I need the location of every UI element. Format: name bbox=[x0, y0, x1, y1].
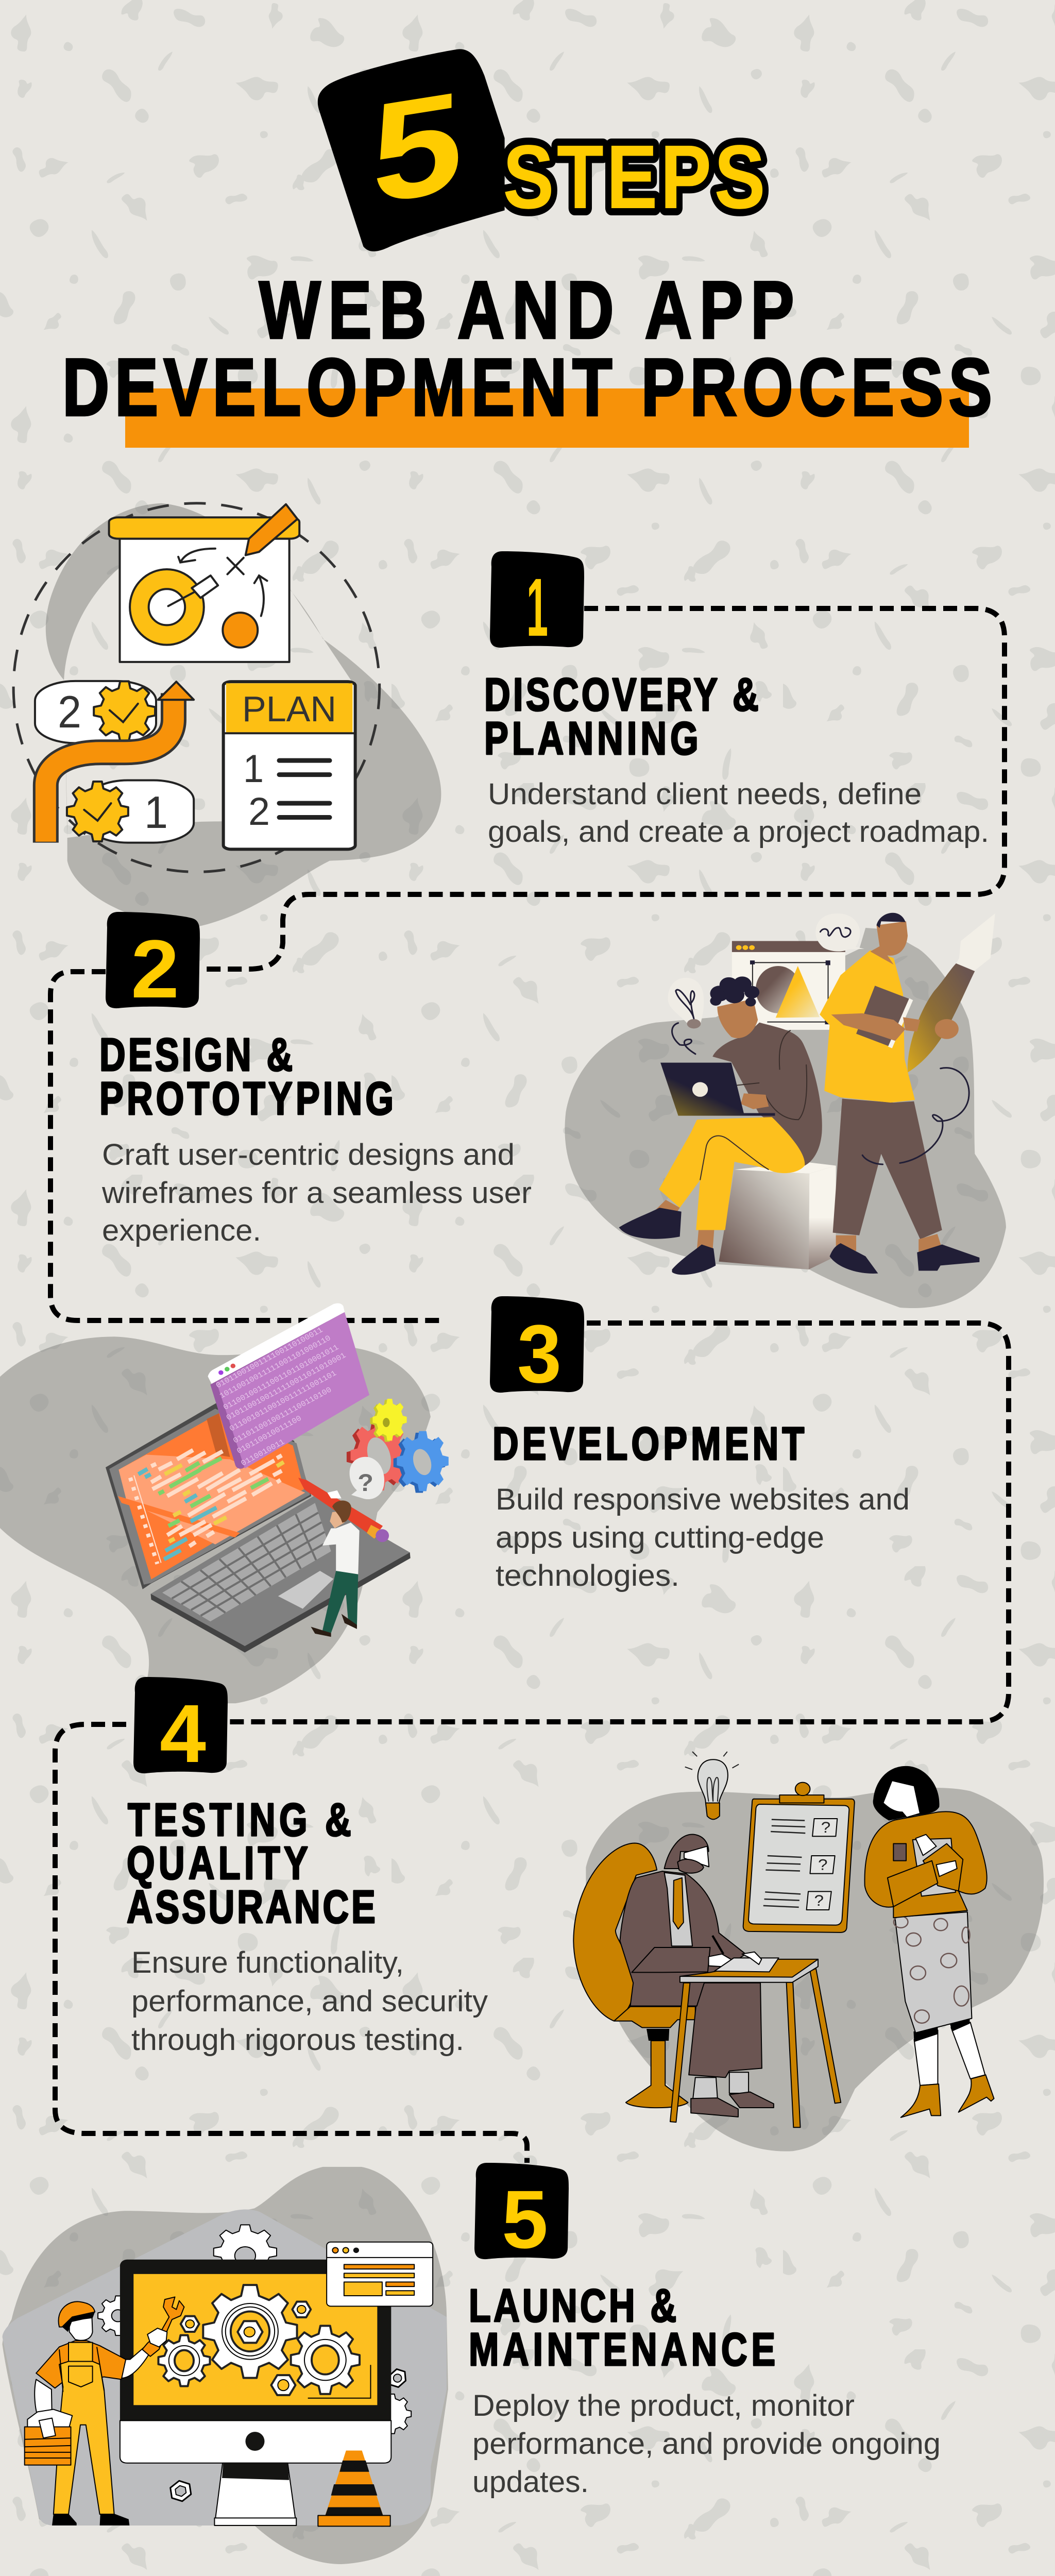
step 4 description bbox=[131, 1946, 488, 2057]
step 5 description: Deploy the product, monitor bbox=[472, 2389, 855, 2422]
gray blob bbox=[586, 1788, 1044, 2151]
step 3 badge: 3 bbox=[517, 1308, 561, 1400]
clipboard: ? bbox=[818, 1856, 828, 1873]
icon labels for planning illustration: 2 bbox=[58, 686, 81, 737]
title block bbox=[62, 49, 992, 448]
pill 2 with gear bbox=[35, 681, 156, 743]
illustration: QA review bbox=[573, 1752, 1044, 2151]
binary window: 10110010011111001101000110 bbox=[218, 1334, 332, 1400]
clipboard: ? bbox=[814, 1892, 824, 1909]
icon labels for planning illustration bbox=[58, 686, 336, 838]
light bulb bbox=[668, 978, 704, 1054]
step 3 badge bbox=[490, 1296, 584, 1400]
step 5 badge bbox=[474, 2163, 569, 2265]
dashed connector 4 to 5 bbox=[55, 1724, 527, 2163]
binary window: 01101100100111100110100 bbox=[231, 1385, 333, 1445]
speech bubble bbox=[815, 913, 864, 952]
seated man bbox=[620, 1835, 774, 2117]
seat cube bbox=[719, 1170, 809, 1269]
step 5 badge: 5 bbox=[502, 2173, 548, 2265]
question bubble: ? bbox=[358, 1470, 373, 1497]
wrench bbox=[142, 2297, 184, 2357]
worker shirt bbox=[36, 2341, 126, 2388]
keyboard bbox=[162, 1503, 333, 1621]
step 1 badge bbox=[490, 551, 584, 653]
binary window: 0110010110010011111001101 bbox=[228, 1369, 338, 1433]
step 2 heading bbox=[99, 1029, 394, 1125]
step 5 heading bbox=[469, 2280, 775, 2376]
nib pen bbox=[908, 963, 975, 1073]
chair bbox=[573, 1843, 695, 2108]
plan card bbox=[224, 682, 355, 849]
big numeral 5: 5 bbox=[372, 61, 463, 234]
binary window: 010110010011100 bbox=[235, 1414, 303, 1455]
gray blob bbox=[565, 928, 1006, 1308]
code lines bbox=[130, 1450, 284, 1564]
binary window: 0101100100111100110100011 bbox=[214, 1326, 325, 1390]
curly hair bbox=[710, 976, 759, 1006]
lighter panel bbox=[2, 2209, 447, 2526]
big tilted black badge bbox=[318, 49, 505, 251]
background gears and nuts bbox=[98, 2225, 411, 2503]
worker overalls bbox=[54, 2343, 114, 2514]
pill 1 with gear bbox=[67, 780, 194, 843]
step 4 heading: QUALITY bbox=[127, 1838, 308, 1889]
step 2 badge: 2 bbox=[131, 923, 179, 1015]
gears bbox=[347, 1399, 449, 1493]
board with target bbox=[109, 504, 299, 662]
step 4 heading: TESTING & bbox=[128, 1794, 351, 1846]
monitor bbox=[120, 2260, 391, 2526]
gray blob bbox=[46, 503, 441, 926]
step 4 heading: ASSURANCE bbox=[127, 1882, 376, 1933]
yellow trousers bbox=[659, 1117, 805, 1230]
step 5 description: performance, and provide ongoing bbox=[472, 2427, 941, 2461]
step 2 heading: DESIGN & bbox=[99, 1029, 293, 1081]
STEPS word: STEPS bbox=[503, 126, 765, 228]
gray blob bbox=[2, 2167, 448, 2564]
illustration: monitor maintenance bbox=[2, 2167, 448, 2564]
step 5 heading: MAINTENANCE bbox=[469, 2324, 775, 2376]
step 2 heading: PROTOTYPING bbox=[99, 1073, 394, 1125]
step 1 description: goals, and create a project roadmap. bbox=[488, 815, 989, 849]
laptop screen bbox=[106, 1403, 311, 1589]
step 4 badge: 4 bbox=[160, 1687, 206, 1780]
desk bbox=[670, 1936, 841, 2127]
step 5 description bbox=[472, 2389, 941, 2499]
icon labels for planning illustration: 1 bbox=[243, 747, 264, 791]
illustration: isometric laptop bbox=[106, 1303, 449, 1652]
step 3 heading: DEVELOPMENT bbox=[492, 1418, 804, 1470]
screen gears bbox=[158, 2285, 370, 2398]
sweater bbox=[712, 1023, 822, 1166]
step 1 heading bbox=[484, 669, 759, 765]
dashed connector 2 to 3 bbox=[50, 972, 440, 1320]
highlight bar bbox=[125, 388, 969, 448]
swirl line bbox=[862, 1068, 969, 1164]
skin legs bbox=[656, 1200, 714, 1251]
illustration: two designers bbox=[565, 913, 1006, 1308]
binary window: 011001001110011011010001011 bbox=[222, 1343, 341, 1412]
step 5 heading: LAUNCH & bbox=[469, 2280, 676, 2332]
traffic cone bbox=[318, 2451, 390, 2526]
worker head bbox=[70, 2317, 93, 2341]
shirt bbox=[820, 950, 915, 1103]
step 1 badge: 1 bbox=[526, 561, 548, 653]
step 3 description bbox=[496, 1483, 910, 1592]
head bbox=[870, 921, 908, 964]
ankles bbox=[836, 1234, 942, 1253]
gray blob behind laptop bbox=[0, 1336, 431, 1703]
step 3 description: technologies. bbox=[496, 1559, 679, 1592]
head bbox=[717, 999, 758, 1038]
binary window: 0101100100111110011011010001 bbox=[225, 1351, 348, 1422]
worker bbox=[25, 2297, 184, 2526]
step 1 description bbox=[488, 777, 989, 849]
step 2 description: Craft user-centric designs and bbox=[102, 1138, 515, 1172]
step 1 description: Understand client needs, define bbox=[488, 777, 922, 811]
icon labels for planning illustration: 1 bbox=[144, 787, 168, 838]
step 4 heading bbox=[127, 1794, 376, 1933]
man with pencil bbox=[311, 1490, 360, 1637]
standing designer bbox=[820, 913, 995, 1274]
toolbox bbox=[27, 2410, 72, 2433]
step 2 description bbox=[101, 1138, 532, 1247]
icon labels for planning illustration: PLAN bbox=[242, 689, 336, 729]
sitting designer bbox=[619, 976, 836, 1275]
step 4 description: through rigorous testing. bbox=[131, 2023, 464, 2057]
dashed connector 1 to 2 bbox=[204, 608, 1005, 969]
dashed connector 3 to 4 bbox=[227, 1323, 1009, 1722]
binary window: 0110010011 bbox=[240, 1437, 286, 1468]
step 3 description: Build responsive websites and bbox=[496, 1483, 910, 1516]
binary window bbox=[208, 1303, 369, 1469]
laptop base bbox=[151, 1496, 411, 1652]
step 1 heading: DISCOVERY & bbox=[484, 669, 759, 721]
design window bbox=[732, 941, 845, 1030]
worker arms bbox=[35, 2379, 52, 2420]
clipboard: ? bbox=[821, 1819, 830, 1836]
question bubble bbox=[350, 1457, 384, 1499]
browser popup bbox=[327, 2242, 433, 2306]
step 1 heading: PLANNING bbox=[484, 713, 699, 765]
road arrow bbox=[46, 682, 194, 843]
step 4 badge bbox=[133, 1677, 228, 1780]
arms bbox=[831, 1013, 920, 1041]
step 2 description: wireframes for a seamless user bbox=[101, 1176, 532, 1210]
title line 2: DEVELOPMENT PROCESS bbox=[62, 342, 992, 433]
book bbox=[856, 986, 909, 1047]
trousers bbox=[833, 1098, 942, 1239]
icon labels for planning illustration: 2 bbox=[248, 790, 270, 834]
laptop bbox=[660, 1063, 775, 1116]
light bulb bbox=[685, 1752, 739, 1819]
shoes bbox=[619, 1208, 682, 1239]
shoes bbox=[830, 1243, 878, 1274]
step 2 description: experience. bbox=[102, 1214, 261, 1247]
step 4 description: performance, and security bbox=[131, 1985, 488, 2018]
standing woman bbox=[865, 1766, 994, 2117]
dashed circle bbox=[13, 503, 380, 872]
clipboard bbox=[743, 1783, 855, 1933]
step 5 description: updates. bbox=[472, 2465, 589, 2499]
pencil bbox=[298, 1478, 389, 1542]
step 2 badge bbox=[106, 912, 200, 1015]
step 4 description: Ensure functionality, bbox=[131, 1946, 404, 1979]
title line 1: WEB AND APP bbox=[259, 265, 794, 355]
hands bbox=[741, 1093, 769, 1109]
step 3 description: apps using cutting-edge bbox=[496, 1521, 824, 1554]
boots bbox=[52, 2514, 129, 2526]
illustration: planning icons bbox=[13, 503, 441, 926]
